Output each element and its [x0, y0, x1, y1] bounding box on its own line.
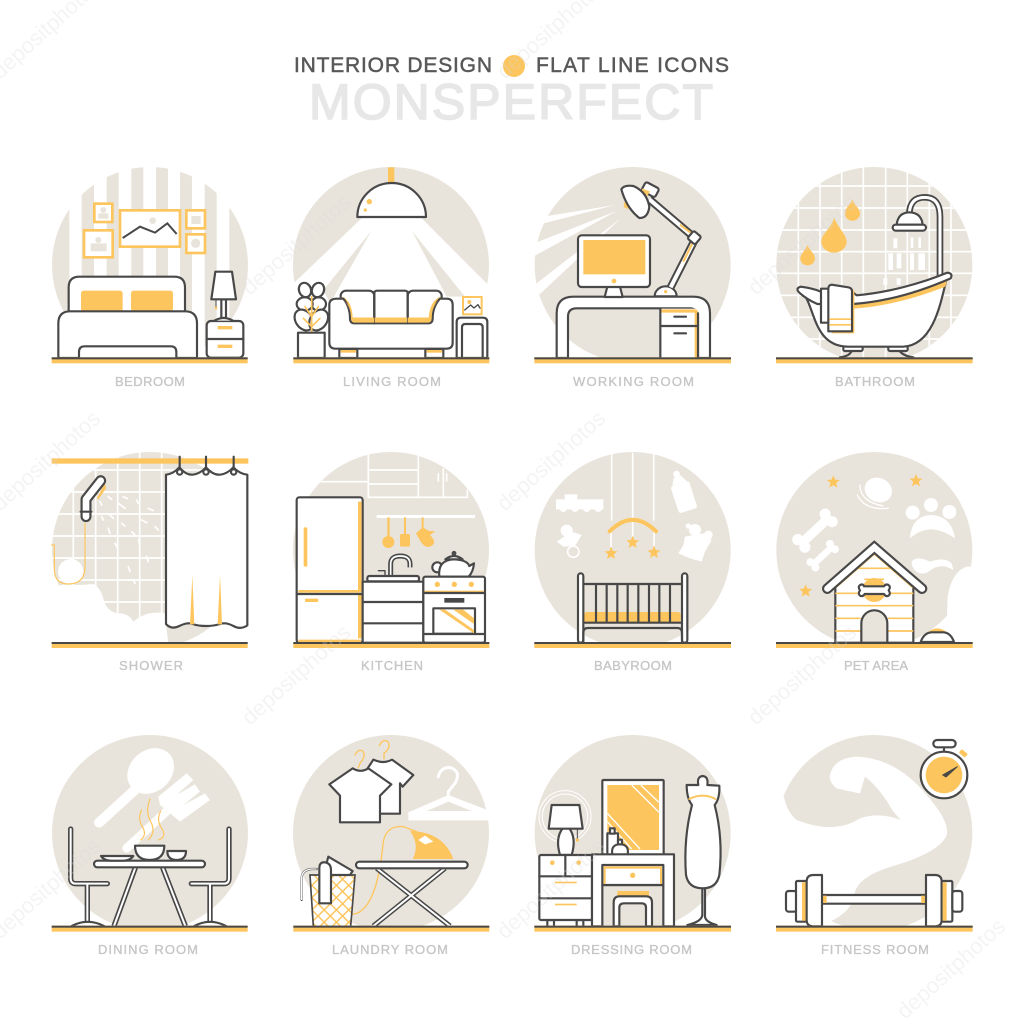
title: top line: [294, 54, 729, 77]
floor line: [776, 642, 973, 648]
room labels: WORKING ROOM: [573, 374, 694, 389]
table lamp: [549, 805, 583, 855]
side table with frame: [457, 297, 487, 358]
watermark: depositphotos: [237, 619, 355, 730]
bed: [58, 277, 197, 358]
dog house: [827, 547, 922, 643]
laundry basket: [302, 857, 355, 926]
room labels: KITCHEN: [361, 658, 423, 673]
sink cabinet: [363, 556, 423, 643]
paw print: [906, 498, 956, 574]
floor line: [534, 357, 731, 363]
title: brand name: MONSPERFECT: [309, 74, 713, 130]
pendant lamp: [357, 167, 426, 217]
watermark: depositphotos: [892, 913, 1010, 1024]
wall cabinets: [313, 453, 475, 518]
panel: bedroom: [52, 150, 248, 370]
curtain rail: [52, 458, 248, 464]
steam cloud cut-out: [43, 584, 170, 660]
iron and cord: [353, 827, 453, 914]
room labels: DINING ROOM: [98, 942, 198, 957]
room labels: BATHROOM: [835, 374, 915, 389]
spoon and fork silhouette: [99, 739, 210, 848]
perfume bottles: [607, 828, 628, 855]
floor line: [293, 926, 489, 932]
hanger silhouette: [408, 768, 490, 820]
chairs: [71, 829, 229, 926]
bones: [790, 506, 841, 573]
white toy silhouettes: [556, 468, 713, 562]
stars: [799, 474, 922, 597]
mirror: [602, 780, 664, 855]
floor line: [534, 642, 731, 648]
desk: [557, 297, 710, 358]
hanging utensils: [382, 517, 435, 548]
t-shirts: [329, 741, 413, 822]
watermark: depositphotos: [492, 833, 610, 944]
dress form: [685, 776, 721, 925]
crib: [578, 573, 687, 643]
floor line: [52, 642, 248, 648]
flexed arm silhouette: [753, 757, 947, 938]
title: top line: INTERIOR DESIGN: [294, 54, 492, 77]
panel: shower: [51, 452, 248, 648]
chest of drawers: [539, 855, 592, 927]
panel: pet area: [776, 452, 993, 660]
watermark: depositphotos: [237, 189, 355, 300]
shower head and hose: [52, 481, 106, 584]
water drops: [800, 199, 860, 265]
water streaks: [100, 497, 158, 583]
dog bowl: [921, 628, 954, 642]
room labels: PET AREA: [844, 658, 908, 673]
panel: fitness room: [753, 735, 973, 938]
room labels: LIVING ROOM: [343, 374, 441, 389]
panel: dining room: [52, 735, 248, 932]
fridge: [297, 497, 363, 643]
sofa: [329, 291, 453, 358]
stopwatch: [921, 740, 968, 798]
panel: laundry room: [293, 735, 490, 932]
vanity table and stool: [592, 854, 674, 926]
ironing board: [356, 862, 468, 926]
monitor: [578, 235, 650, 297]
room labels: FITNESS ROOM: [821, 942, 929, 957]
room labels: DRESSING ROOM: [571, 942, 692, 957]
panel: kitchen: [293, 452, 489, 648]
floor line: [293, 642, 489, 648]
room labels: [98, 374, 929, 957]
title: top line: FLAT LINE ICONS: [536, 54, 729, 77]
room labels: SHOWER: [119, 658, 183, 673]
towel: [821, 285, 854, 333]
ball: [857, 473, 896, 509]
floor line: [776, 357, 973, 363]
curtain: [166, 457, 247, 628]
room labels: LAUNDRY ROOM: [332, 942, 448, 957]
desk lamp: [621, 182, 701, 296]
room labels: BABYROOM: [594, 658, 672, 673]
steam: [140, 799, 164, 840]
panel: working room: [530, 167, 731, 363]
watermark: depositphotos: [492, 405, 610, 516]
room labels: BEDROOM: [115, 374, 185, 389]
picture frames: [84, 204, 205, 257]
floor line: [776, 926, 973, 932]
barbell: [786, 875, 962, 926]
watermark: depositphotos: [743, 189, 861, 300]
panel: bathroom: [776, 167, 973, 364]
stove: [423, 552, 485, 643]
panel: living room: [287, 167, 497, 370]
floor line: [52, 926, 248, 932]
hanging mobile: [604, 453, 660, 559]
watermark: depositphotos: [743, 619, 861, 730]
panel: dressing room: [534, 735, 731, 932]
shower water: [883, 237, 925, 285]
wall tile grid: [776, 168, 972, 358]
table: [94, 846, 205, 926]
floor line: [534, 926, 731, 932]
bathtub: [797, 273, 951, 357]
panel: babyroom: [534, 452, 731, 648]
tile grid: [52, 452, 202, 618]
floor line: [293, 357, 489, 363]
potted plant: [291, 281, 332, 358]
shower head and pipe: [893, 197, 940, 276]
floor line: [52, 357, 248, 363]
nightstand and lamp: [207, 272, 243, 358]
